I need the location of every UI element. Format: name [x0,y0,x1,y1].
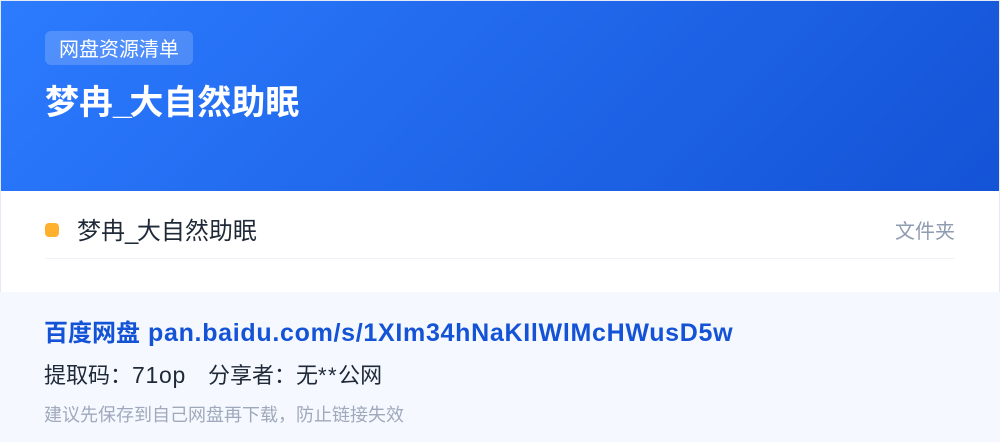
tag: resource list: 网盘资源清单 [59,39,179,61]
panel: header banner [1,1,999,191]
file name: 梦冉_大自然助眠 [77,218,257,245]
file type label: 文件夹 [895,221,955,243]
icon: orange dot [45,223,59,237]
tag: resource list [45,31,193,65]
panel: share info [0,292,1000,442]
share link: 百度网盘 pan.baidu.com/s/1XIm34hNaKIlWlMcHWusD5w [44,319,733,347]
heading: title: 梦冉_大自然助眠 [45,84,299,122]
extraction code and sharer: 提取码：71op 分享者：无**公网 [44,362,382,388]
note: 建议先保存到自己网盘再下载，防止链接失效 [44,405,404,425]
